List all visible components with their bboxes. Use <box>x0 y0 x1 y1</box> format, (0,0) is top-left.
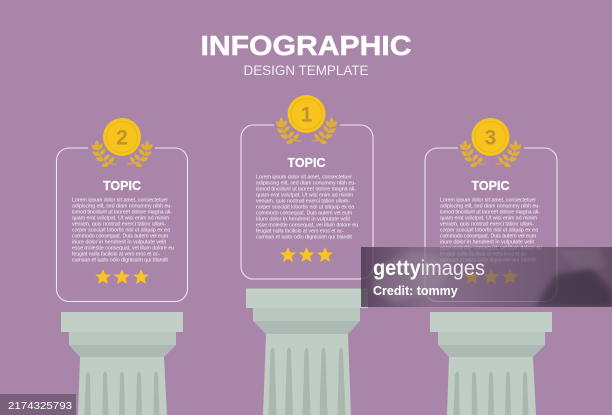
body text: veniam, quis nostrud exerci tation ullam- <box>440 222 534 228</box>
column: second place <box>61 312 183 415</box>
body text: corper suscipit lobortis nisl ut aliquip ex ea <box>72 228 170 234</box>
body text: Lorem ipsum dolor sit amet, consectetuer <box>256 174 352 180</box>
body text: adipiscing elit, sed diam nonummy nibh eu- <box>256 180 356 186</box>
body text: iriure dolor in hendrerit in vulputate velit <box>72 240 167 246</box>
body text: ismod tincidunt ut laoreet dolore magna ali- <box>256 186 356 192</box>
column: first place <box>246 288 368 415</box>
body text: corper suscipit lobortis nisl ut aliquip ex ea <box>256 204 354 210</box>
body text: veniam, quis nostrud exerci tation ullam- <box>72 222 166 228</box>
medal: number 1 <box>274 95 339 145</box>
column: third place <box>430 312 552 415</box>
card outline <box>56 148 188 302</box>
body text: cumsan et iusto odio dignissim qui blandit <box>72 258 169 264</box>
topic heading: TOPIC <box>472 179 509 193</box>
body text: esse molestie consequat, vel illum dolore eu <box>72 246 174 252</box>
body text: Lorem ipsum dolor sit amet, consectetuer <box>440 198 536 204</box>
watermark: getty images credit <box>361 247 612 307</box>
wordmark: gettyimages <box>373 257 485 280</box>
topic heading: TOPIC <box>288 156 325 170</box>
body text: commodo consequat. Duis autem vel eum <box>72 234 168 240</box>
body text <box>440 198 542 264</box>
body text <box>256 174 358 240</box>
body text: esse molestie consequat, vel illum dolore eu <box>256 222 358 228</box>
body text: Lorem ipsum dolor sit amet, consectetuer <box>72 198 168 204</box>
topic heading: TOPIC <box>103 179 141 193</box>
body text: feugiat nulla facilisis at vero eros et ac- <box>72 252 160 258</box>
body text: iriure dolor in hendrerit in vulputate velit <box>440 240 535 246</box>
body text: quam erat volutpat. Ut wisi enim ad minim <box>72 216 169 222</box>
body text: adipiscing elit, sed diam nonummy nibh eu- <box>72 204 172 210</box>
medal: number 3 <box>458 118 523 168</box>
image id tag: 2174325793 <box>8 401 72 412</box>
body text: corper suscipit lobortis nisl ut aliquip ex ea <box>440 228 538 234</box>
body text: quam erat volutpat. Ut wisi enim ad minim <box>440 216 537 222</box>
panel: rank 2 <box>56 118 188 302</box>
panel: rank 1 <box>241 95 373 279</box>
medal: number 3: 3 <box>485 126 496 150</box>
medal: number 2: 2 <box>116 126 128 150</box>
card outline <box>425 148 557 302</box>
panel: rank 3 <box>425 118 557 302</box>
rating stars <box>280 247 333 262</box>
body text: cumsan et iusto odio dignissim qui blandit <box>440 258 537 264</box>
body text: iriure dolor in hendrerit in vulputate velit <box>256 216 351 222</box>
body text: veniam, quis nostrud exerci tation ullam- <box>256 198 350 204</box>
subheading: DESIGN TEMPLATE: DESIGN TEMPLATE <box>244 63 368 78</box>
title <box>200 30 412 78</box>
body text: ismod tincidunt ut laoreet dolore magna ali- <box>440 210 540 216</box>
body text: esse molestie consequat, vel illum dolore eu <box>440 246 542 252</box>
body text: commodo consequat. Duis autem vel eum <box>256 210 352 216</box>
rating stars <box>95 269 149 284</box>
body text: ismod tincidunt ut laoreet dolore magna ali- <box>72 210 172 216</box>
card outline <box>241 125 373 279</box>
body text: cumsan et iusto odio dignissim qui blandit <box>256 234 353 240</box>
body text: quam erat volutpat. Ut wisi enim ad minim <box>256 192 353 198</box>
body text: commodo consequat. Duis autem vel eum <box>440 234 536 240</box>
credit line: Credit: tommy <box>373 284 458 298</box>
body text: feugiat nulla facilisis at vero eros et ac- <box>256 228 344 234</box>
body text: adipiscing elit, sed diam nonummy nibh eu- <box>440 204 540 210</box>
medal: number 1: 1 <box>301 104 313 126</box>
body text: feugiat nulla facilisis at vero eros et ac- <box>440 252 528 258</box>
image id tag <box>0 394 76 415</box>
body text <box>72 198 174 264</box>
medal: number 2 <box>90 118 154 168</box>
rating stars <box>464 269 518 284</box>
heading: INFOGRAPHIC: INFOGRAPHIC <box>200 30 412 61</box>
